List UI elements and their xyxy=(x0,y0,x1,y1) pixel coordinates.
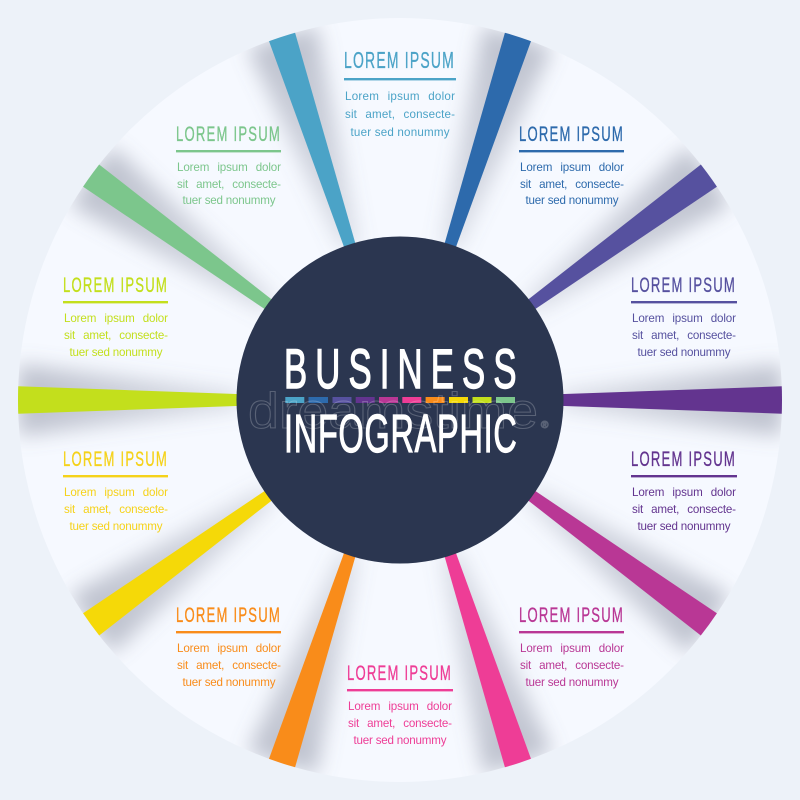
block: yellow xyxy=(63,447,168,533)
block: green xyxy=(176,122,281,207)
block: orange: Lorem ipsum dolor xyxy=(177,642,281,655)
block: indigo: tuer sed nonummy xyxy=(638,346,731,359)
block: blue xyxy=(519,122,624,207)
block: green: Lorem ipsum dolor xyxy=(177,161,281,174)
block: yellow: Lorem ipsum dolor xyxy=(64,486,168,499)
spoke: indigo xyxy=(528,164,717,309)
block: yellow: sit amet, consecte- xyxy=(64,503,168,516)
block: blue: LOREM IPSUM xyxy=(519,122,624,146)
block: teal top: tuer sed nonummy xyxy=(350,126,450,139)
block: magenta: LOREM IPSUM xyxy=(519,603,624,627)
block: teal top: Lorem ipsum dolor xyxy=(345,90,455,103)
block: yellow: LOREM IPSUM xyxy=(63,447,168,471)
spoke: magenta xyxy=(528,491,717,636)
spoke: lime xyxy=(10,386,250,414)
block: teal top: LOREM IPSUM xyxy=(344,47,455,73)
block: magenta: sit amet, consecte- xyxy=(520,659,624,672)
block: blue: sit amet, consecte- xyxy=(520,178,624,191)
centre circle xyxy=(236,236,564,564)
spoke: purple xyxy=(550,386,790,414)
block: lime xyxy=(63,273,168,359)
block: lime: tuer sed nonummy xyxy=(70,346,163,359)
block: indigo: sit amet, consecte- xyxy=(632,329,736,342)
block: yellow: tuer sed nonummy xyxy=(70,520,163,533)
block: pink bottom: Lorem ipsum dolor xyxy=(348,700,452,713)
block: green: sit amet, consecte- xyxy=(177,178,281,191)
spoke: green xyxy=(83,164,272,309)
block: indigo: Lorem ipsum dolor xyxy=(632,312,736,325)
block: orange: sit amet, consecte- xyxy=(177,659,281,672)
block: magenta: Lorem ipsum dolor xyxy=(520,642,624,655)
block: lime: sit amet, consecte- xyxy=(64,329,168,342)
block: pink bottom: sit amet, consecte- xyxy=(348,717,452,730)
spoke: pink xyxy=(444,554,531,768)
colour dash row xyxy=(285,397,515,403)
title: INFOGRAPHIC: INFOGRAPHIC xyxy=(284,405,517,464)
block: purple: LOREM IPSUM xyxy=(631,447,736,471)
spoke: orange xyxy=(269,554,356,768)
block: green: tuer sed nonummy xyxy=(182,194,276,207)
block: purple: tuer sed nonummy xyxy=(638,520,731,533)
block: magenta: tuer sed nonummy xyxy=(526,676,619,689)
spoke: teal xyxy=(269,32,356,246)
block: pink bottom: LOREM IPSUM xyxy=(347,661,452,685)
block: pink bottom xyxy=(347,661,453,747)
title: BUSINESS: BUSINESS xyxy=(284,338,517,400)
block: orange xyxy=(176,603,281,689)
block: teal top xyxy=(344,47,456,139)
block: blue: Lorem ipsum dolor xyxy=(520,161,624,174)
block: lime: Lorem ipsum dolor xyxy=(64,312,168,325)
block: purple: Lorem ipsum dolor xyxy=(632,486,736,499)
block: pink bottom: tuer sed nonummy xyxy=(354,734,447,747)
block: orange: LOREM IPSUM xyxy=(176,603,281,627)
block: blue: tuer sed nonummy xyxy=(526,194,619,207)
block: magenta xyxy=(519,603,624,689)
spoke: blue xyxy=(444,32,531,246)
block: green: LOREM IPSUM xyxy=(176,122,281,146)
block: indigo xyxy=(631,273,737,359)
block: indigo: LOREM IPSUM xyxy=(631,273,736,297)
block: teal top: sit amet, consecte- xyxy=(345,108,455,121)
watermark: dreamstime xyxy=(248,383,538,439)
block: purple: sit amet, consecte- xyxy=(632,503,736,516)
spoke: yellow xyxy=(83,491,272,636)
block: lime: LOREM IPSUM xyxy=(63,273,168,297)
block: purple xyxy=(631,447,737,533)
block: orange: tuer sed nonummy xyxy=(182,676,276,689)
watermark: ® xyxy=(541,420,549,431)
